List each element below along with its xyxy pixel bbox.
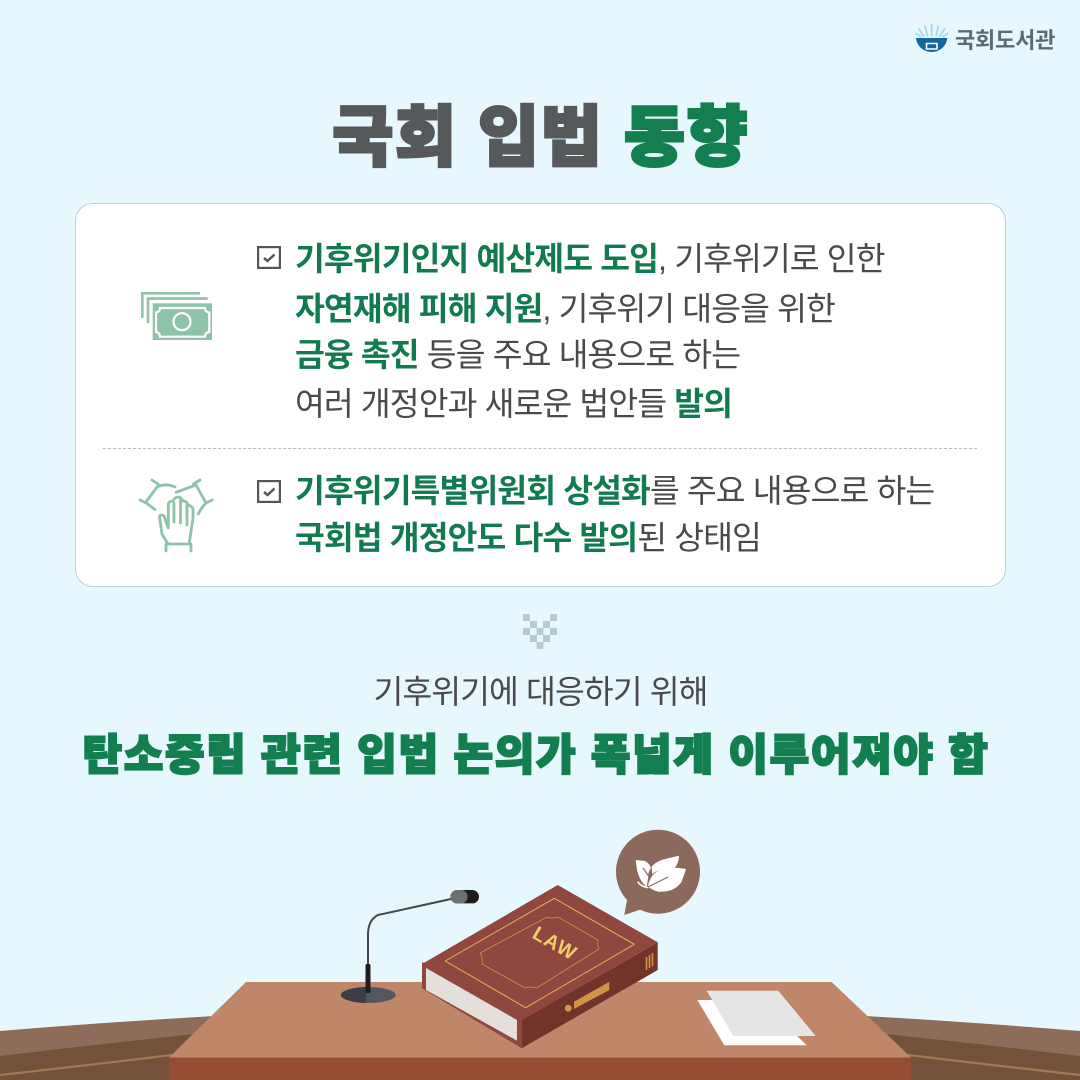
line 3: 금융 촉진 등을 주요 내용으로 하는 bbox=[295, 337, 740, 373]
line 1: 기후위기특별위원회 상설화를 주요 내용으로 하는 bbox=[295, 473, 934, 509]
line 1: 기후위기인지 예산제도 도입, 기후위기로 인한 bbox=[295, 241, 885, 277]
title: 국회 입법 동향 bbox=[332, 100, 750, 174]
icon: logo emblem bbox=[915, 24, 948, 52]
panel: legislative trends bbox=[75, 203, 1006, 587]
left benches bbox=[0, 1016, 215, 1080]
logo: National Assembly Library bbox=[915, 24, 1055, 53]
conclusion heading: 탄소중립 관련 입법 논의가 폭넓게 이루어져야 함 bbox=[82, 732, 990, 780]
line 2: 자연재해 피해 지원, 기후위기 대응을 위한 bbox=[295, 291, 835, 327]
illustration: assembly desk scene bbox=[0, 830, 1080, 1080]
icon: raised hand with network bbox=[138, 478, 214, 552]
microphone bbox=[341, 890, 479, 1003]
subheading: 기후위기에 대응하기 위해 bbox=[373, 674, 708, 710]
logo text: 국회도서관 bbox=[955, 28, 1055, 53]
text block: second item bbox=[295, 473, 934, 556]
book: LAW bbox=[528, 922, 581, 965]
text block: first item bbox=[295, 241, 885, 422]
checkbox 1 bbox=[257, 246, 281, 269]
papers bbox=[697, 991, 816, 1045]
speech bubble with leaves bbox=[616, 830, 700, 915]
book bbox=[422, 885, 658, 1048]
icon: pixel down arrow bbox=[523, 614, 557, 649]
line 2: 국회법 개정안도 다수 발의된 상태임 bbox=[295, 520, 761, 556]
line 4: 여러 개정안과 새로운 법안들 발의 bbox=[295, 386, 732, 422]
right benches bbox=[865, 1016, 1080, 1080]
desk bbox=[169, 982, 911, 1080]
divider line bbox=[103, 448, 977, 449]
icon: money bills bbox=[141, 292, 212, 340]
checkbox 2 bbox=[257, 480, 281, 503]
